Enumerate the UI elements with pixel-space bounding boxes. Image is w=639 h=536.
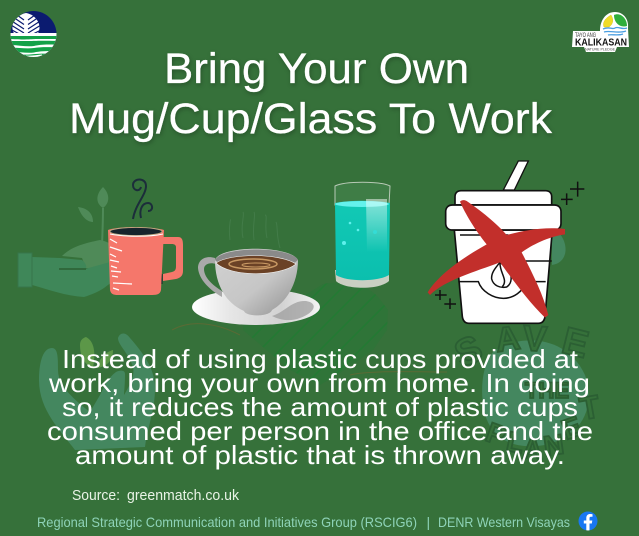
watermark: save the planet lettering: V xyxy=(521,317,548,360)
watermark: save the planet lettering: L xyxy=(504,426,527,459)
title: Bring Your Own xyxy=(164,45,469,93)
icon: coffee cup on saucer xyxy=(192,212,320,325)
body text: Instead of using plastic cups provided at xyxy=(62,344,579,374)
icon: glass of water xyxy=(335,182,390,288)
logo: DENR seal xyxy=(10,11,56,57)
logo: Tayo ang Kalikasan xyxy=(572,12,629,52)
watermark: save the planet lettering xyxy=(449,317,603,465)
watermark: save the planet lettering: E xyxy=(557,410,586,446)
straw xyxy=(503,161,528,190)
watermark: save the planet lettering: E xyxy=(558,320,593,367)
body text xyxy=(47,344,593,470)
source line xyxy=(72,487,239,504)
watermark: save the planet lettering: T xyxy=(577,388,603,427)
logo: Tayo ang Kalikasan: TAYO ANG xyxy=(575,33,596,39)
red cross xyxy=(428,200,565,318)
logo: Tayo ang Kalikasan: KALIKASAN xyxy=(575,37,627,49)
body text: amount of plastic that is thrown away. xyxy=(75,440,565,470)
watermark: hand holding sprout xyxy=(18,187,112,297)
source line: greenmatch.co.uk xyxy=(127,487,239,504)
watermark: save the planet lettering: A xyxy=(522,433,543,465)
icon: red mug with steam xyxy=(108,180,183,295)
logo: Tayo ang Kalikasan: NATURE PLEDGE xyxy=(585,46,615,52)
icon: facebook xyxy=(578,512,598,530)
footer credit: DENR Western Visayas xyxy=(438,514,570,530)
watermark: save the planet lettering: THE xyxy=(525,378,569,403)
icon: disposable plastic cup crossed out xyxy=(428,161,584,323)
source line: Source: xyxy=(72,487,120,504)
footer credit: | xyxy=(426,514,430,530)
cup body and lid xyxy=(446,191,561,323)
footer credit: Regional Strategic Communication and Initiatives Group (RSCIG6) xyxy=(37,514,417,530)
watermark: save the planet lettering: A xyxy=(493,319,522,360)
sparkles xyxy=(435,182,584,309)
watermark: save the planet lettering: P xyxy=(482,417,510,452)
body text: so, it reduces the amount of plastic cups xyxy=(62,392,578,422)
watermark: scribbled green leaf xyxy=(172,235,566,380)
watermark: save the planet lettering: S xyxy=(449,328,489,376)
title: Mug/Cup/Glass To Work xyxy=(69,95,553,143)
body text: work, bring your own from home. In doing xyxy=(48,368,590,398)
title xyxy=(69,45,553,143)
body text: consumed per person in the office and the xyxy=(47,416,593,446)
watermark: cupped hands xyxy=(39,334,155,450)
watermark: save the planet lettering: N xyxy=(542,428,566,462)
